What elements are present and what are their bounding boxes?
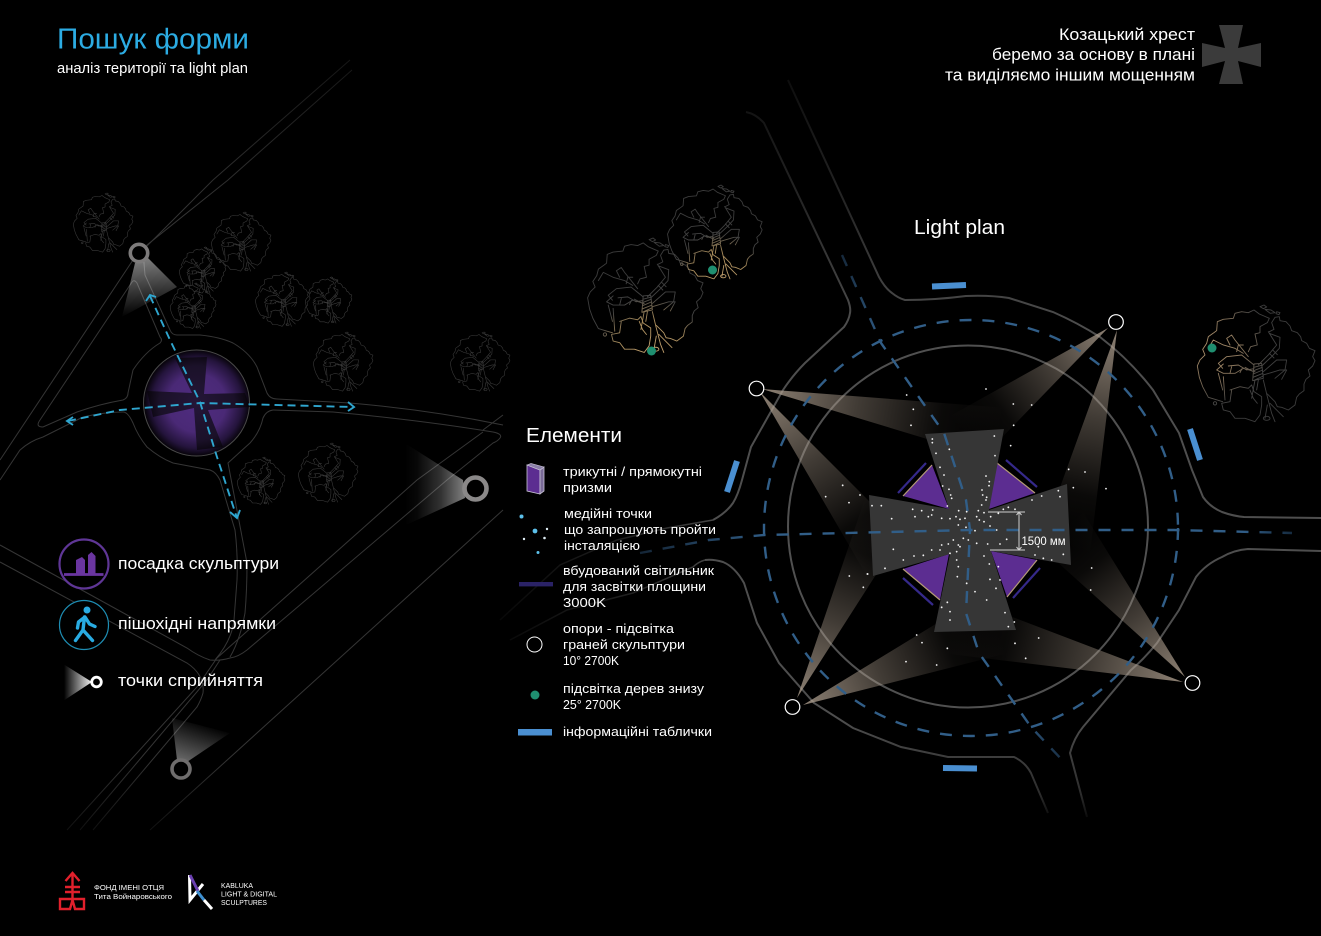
built-in luminaires [898,460,1040,605]
icon: cossack cross [1202,25,1261,84]
logo: Voinarovsky foundation: ФОНД ІМЕНІ ОТЦЯ [94,885,164,892]
light plan: beams [760,328,1185,705]
pedestrian directions: arrows [67,295,354,518]
media dots around cross [826,389,1106,665]
legend item: built-in luminaire: 3000K [563,595,606,610]
tree: lit large [588,238,703,352]
legend item: built-in luminaire: вбудований світильник [563,563,714,578]
legend item: poles [527,621,685,668]
legend: perception points: точки сприйняття [118,671,263,690]
dashed blue paths [640,255,1292,762]
legend item: media dots [520,506,716,554]
legend item: tree uplight: підсвітка дерев знизу [563,681,704,696]
left site map: trees [73,193,510,504]
legend item: built-in luminaire [519,563,714,610]
heading: elements: Елементи [526,424,622,447]
title: Пошук форми [57,24,249,56]
text block: cossack cross note: та виділяємо іншим мощенням [945,66,1195,84]
legend item: poles: опори - підсвітка [563,621,675,636]
cossack cross paving [869,429,1071,632]
legend item: prisms [527,464,702,495]
legend item: media dots: що запрошують пройти [564,522,716,537]
light poles [749,315,1200,714]
text block: cossack cross note: беремо за основу в плані [992,46,1195,64]
tree: lit small [668,185,762,279]
legend item: poles: 10° 2700K [563,653,619,668]
subtitle: аналіз території та light plan [57,61,248,77]
tree: lit east [1197,305,1315,422]
logo: Kabluka: KABLUKA [221,883,253,890]
light plan: faint west roads [500,520,713,640]
legend item: media dots: інсталяцією [564,538,640,553]
perception point: east [400,440,486,525]
legend: pedestrian directions: пішохідні напрямки [118,614,276,633]
dimension: 1500 mm: 1500 мм [1022,536,1066,548]
light plan: inner ring [788,346,1148,708]
logo: Kabluka: SCULPTURES [221,900,267,907]
legend: sculpture placement [60,540,279,588]
legend: perception points [60,662,263,703]
logo: Kabluka [190,875,277,909]
left site map: sculpture footprint [144,350,250,456]
legend item: prisms: трикутні / прямокутні [563,464,702,479]
legend item: poles: граней скульптури [563,637,685,652]
legend item: built-in luminaire: для засвітки площини [563,579,706,594]
logo: Voinarovsky foundation: Тита Войнаровського [94,893,172,901]
light plan: roads [705,80,1321,817]
dimension: 1500 mm [988,512,1066,550]
legend item: media dots: медійні точки [564,506,652,521]
media dots on cross [867,436,1063,627]
legend item: tree uplight [530,681,704,712]
legend item: tree uplight: 25° 2700K [563,697,621,712]
tree uplights [647,266,1216,356]
legend: sculpture placement: посадка скульптури [118,554,279,573]
logo: Kabluka: LIGHT & DIGITAL [221,892,277,898]
logo: Voinarovsky foundation [60,873,172,909]
left site map: roads [0,60,503,830]
text block: cossack cross note: Козацький хрест [1059,26,1195,44]
legend item: prisms: призми [563,480,612,495]
perception point: north [122,244,177,317]
sculpture prisms [903,463,1037,600]
heading: light plan: Light plan [914,216,1005,239]
text block: cossack cross note [945,26,1195,84]
legend: pedestrian directions [60,600,276,650]
perception point: south [172,718,230,778]
legend item: info signs: інформаційні таблички [563,724,712,739]
info signs [727,285,1200,768]
